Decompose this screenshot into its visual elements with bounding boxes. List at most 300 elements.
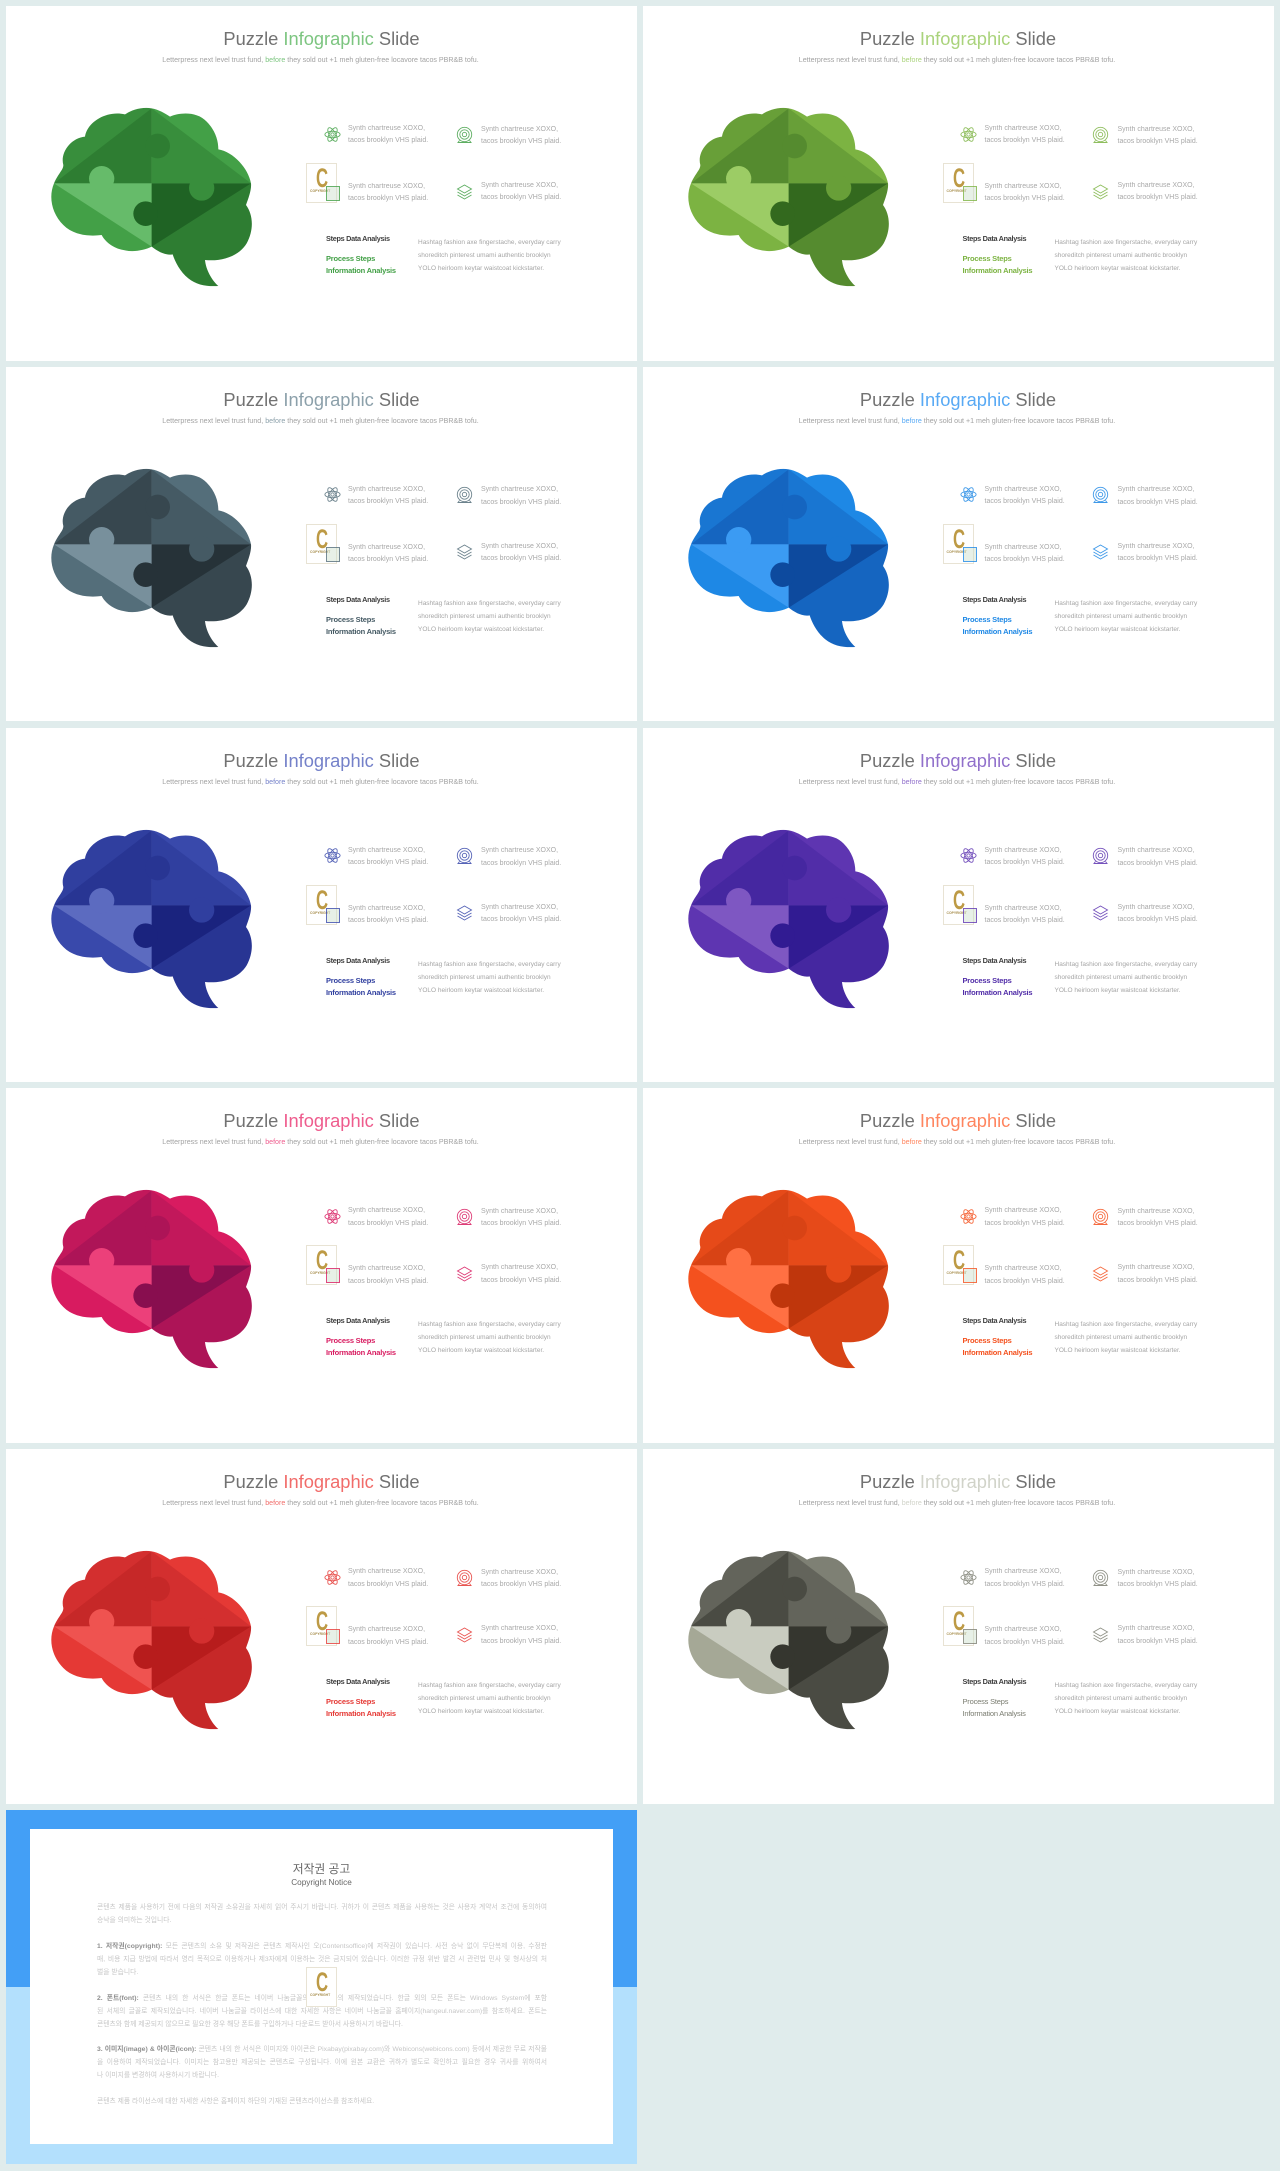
feature text 2 — [1118, 1567, 1198, 1592]
icon: atom — [960, 1569, 977, 1586]
feature text 4: Synth chartreuse XOXO, — [481, 904, 558, 911]
analysis highlights: Process Steps — [962, 1336, 1012, 1345]
panel: blue slide — [642, 367, 1274, 721]
notice intro: 승낙을 의미하는 것입니다. — [97, 1916, 171, 1924]
feature text 1: tacos brooklyn VHS plaid. — [348, 859, 428, 866]
feature text 4 — [1118, 1262, 1198, 1287]
icon: atom — [960, 847, 977, 864]
feature text 1 — [984, 484, 1065, 509]
copyright badge: C — [316, 1606, 328, 1636]
analysis paragraph: Hashtag fashion axe fingerstache, everyday carry — [418, 961, 561, 968]
panel: lime slide — [642, 6, 1274, 360]
subtitle: Letterpress next level trust fund, before they sold out +1 meh gluten-free locavore tacos PBR&B tofu. — [799, 778, 1115, 786]
icon: atom — [324, 1208, 340, 1225]
analysis highlights: Process Steps — [326, 1697, 375, 1706]
analysis paragraph: shoreditch pinterest umami authentic brooklyn — [1054, 252, 1187, 259]
analysis heading: Steps Data Analysis — [962, 1677, 1026, 1686]
feature text 1 — [984, 1205, 1065, 1230]
puzzle brain — [688, 108, 889, 286]
heading: Puzzle Infographic Slide — [860, 389, 1056, 410]
feature text 4 — [481, 1262, 561, 1287]
feature text 2: tacos brooklyn VHS plaid. — [481, 1220, 561, 1227]
feature text 4: Synth chartreuse XOXO, — [1118, 182, 1195, 189]
feature text 3: tacos brooklyn VHS plaid. — [984, 1278, 1065, 1285]
analysis heading: Steps Data Analysis — [962, 1316, 1026, 1325]
feature text 1: Synth chartreuse XOXO, — [348, 486, 425, 493]
feature text 3 — [984, 542, 1065, 567]
feature text 3 — [984, 1263, 1065, 1288]
feature text 2: tacos brooklyn VHS plaid. — [1118, 499, 1198, 506]
notice section 1: 1. 저작권(copyright): 모든 콘텐츠의 소유 및 저작권은 콘텐츠 제작사인 오(Contentsoffice)에 저작권이 있습니다. 사전 승낙 없이 무단복제 이용, 수정판 — [97, 1943, 547, 1950]
copyright badge: C — [952, 1245, 965, 1275]
analysis highlights: Process Steps — [326, 615, 375, 624]
notice section 3 — [97, 2045, 547, 2081]
analysis highlights — [326, 1696, 396, 1720]
feature text 1: tacos brooklyn VHS plaid. — [348, 137, 428, 144]
feature text 1 — [348, 125, 428, 144]
notice section 1: 벌을 받습니다. — [97, 1969, 138, 1976]
subtitle: Letterpress next level trust fund, before they sold out +1 meh gluten-free locavore tacos PBR&B tofu. — [162, 417, 479, 425]
panel: pink slide — [6, 1088, 637, 1443]
feature text 1: tacos brooklyn VHS plaid. — [984, 137, 1065, 144]
heading: Puzzle Infographic Slide — [223, 750, 420, 771]
puzzle brain — [30, 1533, 270, 1743]
notice intro: 콘텐츠 제품을 사용하기 전에 다음의 저작권 소유권을 자세히 읽어 주시기 바랍니다. 귀하가 이 콘텐츠 제품을 사용하는 것은 사용자 계약서 조건에 동의하여 — [97, 1904, 547, 1911]
notice section 3: 3. 이미지(image) & 아이콘(icon): 콘텐츠 내의 한 서식은 이미지와 아이콘은 Pixabay(pixabay.com)와 Webicons(webicons.com) 등에서 제공한 무료 저작물 — [97, 2046, 547, 2053]
analysis paragraph: Hashtag fashion axe fingerstache, everyday carry — [418, 1321, 561, 1328]
feature text 4: tacos brooklyn VHS plaid. — [481, 194, 561, 201]
feature text 2: tacos brooklyn VHS plaid. — [1118, 1581, 1198, 1588]
feature text 4: Synth chartreuse XOXO, — [1118, 904, 1195, 911]
icon: target — [1092, 126, 1108, 143]
feature text 4 — [1118, 1623, 1198, 1648]
analysis paragraph: YOLO heirloom keytar waistcoat kickstarter. — [1054, 1347, 1181, 1354]
feature text 2 — [1118, 1206, 1198, 1231]
feature text 2: tacos brooklyn VHS plaid. — [481, 860, 561, 866]
copyright badge — [306, 1245, 337, 1285]
analysis paragraph: YOLO heirloom keytar waistcoat kickstarter. — [1054, 626, 1181, 633]
analysis highlights: Information Analysis — [326, 1709, 396, 1718]
analysis paragraph — [418, 600, 561, 633]
copyright badge: C — [952, 524, 965, 554]
analysis paragraph: Hashtag fashion axe fingerstache, everyday carry — [1054, 600, 1197, 607]
analysis paragraph: Hashtag fashion axe fingerstache, everyday carry — [1054, 239, 1197, 246]
feature text 3 — [348, 1263, 428, 1288]
icon: layers — [1092, 184, 1108, 200]
puzzle brain — [30, 812, 270, 1022]
analysis paragraph — [418, 239, 561, 272]
feature text 1: tacos brooklyn VHS plaid. — [348, 498, 428, 505]
feature text 2: tacos brooklyn VHS plaid. — [1118, 138, 1198, 145]
feature text 2 — [481, 126, 561, 145]
copyright badge: C — [952, 885, 965, 915]
feature text 2 — [1118, 845, 1198, 870]
feature text 3: tacos brooklyn VHS plaid. — [984, 195, 1065, 202]
analysis highlights — [962, 1335, 1032, 1359]
notice section 2: 콘텐츠와 함께 제공되지 않으므로 필요한 경우 해당 폰트를 구입하거나 다운로드 받아서 사용하시기 바랍니다. — [97, 2020, 403, 2028]
subtitle: Letterpress next level trust fund, before they sold out +1 meh gluten-free locavore tacos PBR&B tofu. — [799, 1138, 1115, 1146]
feature text 1: Synth chartreuse XOXO, — [984, 1207, 1062, 1214]
feature text 1 — [348, 1566, 428, 1591]
analysis heading: Steps Data Analysis — [962, 595, 1026, 604]
panel: indigo slide — [6, 728, 637, 1082]
feature text 3 — [348, 183, 428, 202]
feature text 3: tacos brooklyn VHS plaid. — [348, 195, 428, 202]
icon: target — [456, 847, 472, 864]
copyright badge: COPYRIGHT — [946, 550, 967, 554]
heading: Puzzle Infographic Slide — [223, 28, 420, 49]
feature text 2: Synth chartreuse XOXO, — [1118, 126, 1195, 132]
analysis heading: Steps Data Analysis — [326, 956, 390, 965]
subtitle: Letterpress next level trust fund, before they sold out +1 meh gluten-free locavore tacos PBR&B tofu. — [799, 417, 1115, 425]
feature text 4 — [1118, 902, 1198, 926]
analysis paragraph: YOLO heirloom keytar waistcoat kickstarter. — [418, 1708, 544, 1715]
feature text 1: Synth chartreuse XOXO, — [348, 847, 425, 854]
feature text 3: Synth chartreuse XOXO, — [348, 1265, 425, 1272]
analysis paragraph: YOLO heirloom keytar waistcoat kickstarter. — [1054, 987, 1181, 994]
icon: layers — [1092, 544, 1109, 561]
notice section 3: 을 이용하여 제작되었습니다. 이미지는 참고용만 제공되는 콘텐츠로 구성됩니다. 이에 원본 교환은 귀하가 별도로 확인하고 필요한 경우 귀사를 위하여서 — [97, 2059, 547, 2066]
feature text 1: Synth chartreuse XOXO, — [984, 1568, 1062, 1575]
panel: copyright notice — [30, 1829, 613, 2144]
notice section 2 — [97, 1994, 547, 2030]
icon: target — [1092, 1569, 1109, 1586]
feature text 2: Synth chartreuse XOXO, — [1118, 847, 1195, 854]
analysis heading: Steps Data Analysis — [326, 595, 390, 604]
analysis paragraph: Hashtag fashion axe fingerstache, everyday carry — [1054, 1321, 1197, 1328]
heading: Puzzle Infographic Slide — [860, 750, 1056, 771]
analysis paragraph: Hashtag fashion axe fingerstache, everyday carry — [418, 239, 561, 246]
icon: layers — [456, 1266, 472, 1283]
icon: layers — [456, 184, 472, 200]
analysis highlights: Information Analysis — [326, 266, 396, 275]
feature text 3: Synth chartreuse XOXO, — [348, 544, 425, 551]
feature text 4: tacos brooklyn VHS plaid. — [1118, 1277, 1198, 1284]
copyright badge — [942, 163, 974, 203]
feature text 1: tacos brooklyn VHS plaid. — [984, 498, 1065, 505]
analysis paragraph: shoreditch pinterest umami authentic brooklyn — [418, 252, 551, 259]
puzzle brain — [51, 468, 252, 648]
icon: layers — [456, 905, 472, 922]
feature text 4 — [1118, 182, 1198, 201]
analysis heading: Steps Data Analysis — [962, 234, 1026, 243]
analysis highlights: Information Analysis — [326, 988, 396, 997]
analysis highlights — [326, 254, 396, 275]
feature text 1: tacos brooklyn VHS plaid. — [348, 1581, 428, 1588]
icon: layers — [1092, 905, 1109, 922]
analysis highlights: Process Steps — [326, 1336, 375, 1345]
feature text 3: Synth chartreuse XOXO, — [984, 905, 1062, 912]
copyright badge: C — [316, 163, 328, 193]
feature text 3: Synth chartreuse XOXO, — [984, 183, 1062, 190]
feature text 3: Synth chartreuse XOXO, — [984, 1626, 1062, 1633]
copyright badge: C — [316, 1967, 328, 1997]
analysis paragraph: shoreditch pinterest umami authentic brooklyn — [418, 1334, 551, 1341]
feature text 2: Synth chartreuse XOXO, — [1118, 1208, 1195, 1215]
copyright title: 저작권 공고 — [293, 1862, 350, 1876]
band: copyright blue top — [6, 1810, 637, 1987]
panel: blue-gray slide — [6, 367, 637, 721]
copyright badge — [942, 1606, 974, 1646]
feature text 1: tacos brooklyn VHS plaid. — [984, 1581, 1065, 1588]
feature text 2: Synth chartreuse XOXO, — [481, 486, 558, 493]
icon: atom — [324, 847, 340, 864]
analysis paragraph: YOLO heirloom keytar waistcoat kickstarter. — [1054, 265, 1181, 272]
analysis paragraph: Hashtag fashion axe fingerstache, everyday carry — [418, 600, 561, 607]
feature text 4: tacos brooklyn VHS plaid. — [1118, 1638, 1198, 1645]
analysis paragraph: Hashtag fashion axe fingerstache, everyday carry — [1054, 961, 1197, 968]
feature text 4 — [481, 182, 561, 201]
heading: Puzzle Infographic Slide — [860, 28, 1056, 49]
subtitle: Letterpress next level trust fund, before they sold out +1 meh gluten-free locavore tacos PBR&B tofu. — [162, 778, 479, 786]
feature text 4: Synth chartreuse XOXO, — [1118, 543, 1195, 550]
heading: Puzzle Infographic Slide — [223, 1471, 420, 1492]
copyright badge: C — [316, 1245, 328, 1275]
band: copyright light blue bottom — [6, 1987, 637, 2164]
feature text 3: Synth chartreuse XOXO, — [348, 1626, 425, 1633]
subtitle: Letterpress next level trust fund, before they sold out +1 meh gluten-free locavore tacos PBR&B tofu. — [162, 1499, 479, 1507]
analysis highlights: Process Steps — [962, 976, 1012, 985]
analysis heading: Steps Data Analysis — [962, 956, 1026, 965]
feature text 3: tacos brooklyn VHS plaid. — [348, 556, 428, 563]
feature text 1 — [984, 845, 1065, 869]
feature text 2: Synth chartreuse XOXO, — [481, 1208, 558, 1215]
puzzle brain — [688, 468, 889, 648]
feature text 1: Synth chartreuse XOXO, — [348, 1568, 425, 1575]
analysis paragraph — [418, 1679, 561, 1718]
heading: Puzzle Infographic Slide — [860, 1110, 1056, 1131]
feature text 4 — [481, 1623, 561, 1648]
analysis highlights: Process Steps — [326, 976, 375, 985]
feature text 3: tacos brooklyn VHS plaid. — [348, 1639, 428, 1646]
subtitle: Letterpress next level trust fund, before they sold out +1 meh gluten-free locavore tacos PBR&B tofu. — [799, 56, 1115, 64]
feature text 3 — [348, 544, 428, 563]
copyright badge — [306, 524, 337, 564]
feature text 1 — [984, 125, 1065, 144]
icon: target — [1092, 1208, 1109, 1225]
puzzle brain — [666, 1172, 906, 1382]
feature text 4: tacos brooklyn VHS plaid. — [481, 916, 561, 923]
analysis highlights: Process Steps — [962, 1697, 1008, 1706]
analysis paragraph: shoreditch pinterest umami authentic brooklyn — [1054, 1695, 1187, 1702]
icon: target — [1092, 847, 1109, 864]
feature text 2: tacos brooklyn VHS plaid. — [481, 1581, 561, 1588]
icon: target — [1092, 486, 1109, 503]
feature text 3 — [348, 903, 428, 927]
analysis paragraph: shoreditch pinterest umami authentic brooklyn — [1054, 974, 1187, 981]
copyright badge: C — [316, 524, 328, 554]
copyright subtitle: Copyright Notice — [291, 1878, 352, 1887]
feature text 3 — [984, 183, 1065, 202]
analysis highlights — [962, 1696, 1026, 1720]
feature text 4: Synth chartreuse XOXO, — [481, 182, 558, 189]
feature text 2 — [481, 1206, 561, 1231]
analysis highlights: Information Analysis — [326, 1348, 396, 1357]
icon: layers — [456, 1627, 472, 1644]
icon: atom — [324, 487, 340, 502]
feature text 3: tacos brooklyn VHS plaid. — [348, 1278, 428, 1285]
feature text 2 — [481, 1567, 561, 1592]
feature text 3: tacos brooklyn VHS plaid. — [348, 917, 428, 924]
feature text 4 — [481, 543, 561, 562]
copyright badge — [942, 524, 974, 564]
panel: purple slide — [642, 728, 1274, 1082]
analysis highlights: Information Analysis — [962, 1348, 1032, 1357]
analysis highlights: Process Steps — [326, 254, 375, 263]
feature text 1: Synth chartreuse XOXO, — [984, 847, 1062, 854]
panel: gray slide — [642, 1449, 1274, 1804]
icon: target — [456, 126, 472, 143]
feature text 3: tacos brooklyn VHS plaid. — [984, 917, 1065, 924]
analysis paragraph: YOLO heirloom keytar waistcoat kickstarter. — [418, 626, 544, 633]
feature text 3 — [984, 1624, 1065, 1649]
copyright badge: COPYRIGHT — [946, 1271, 967, 1275]
subtitle: Letterpress next level trust fund, before they sold out +1 meh gluten-free locavore tacos PBR&B tofu. — [162, 56, 479, 64]
copyright badge: COPYRIGHT — [946, 911, 967, 915]
feature text 4: Synth chartreuse XOXO, — [1118, 1264, 1195, 1271]
copyright badge: COPYRIGHT — [310, 911, 330, 915]
feature text 2: Synth chartreuse XOXO, — [481, 126, 558, 132]
icon: atom — [324, 1569, 340, 1586]
feature text 2 — [481, 845, 561, 870]
icon: layers — [1092, 1266, 1109, 1283]
feature text 3: Synth chartreuse XOXO, — [984, 544, 1062, 551]
feature text 4: tacos brooklyn VHS plaid. — [1118, 555, 1198, 562]
notice section 1 — [97, 1942, 547, 1978]
analysis highlights: Information Analysis — [962, 988, 1032, 997]
feature text 1: Synth chartreuse XOXO, — [348, 125, 425, 132]
analysis paragraph: Hashtag fashion axe fingerstache, everyday carry — [418, 1682, 561, 1689]
icon: atom — [960, 1208, 977, 1225]
analysis paragraph: YOLO heirloom keytar waistcoat kickstarter. — [1054, 1708, 1181, 1715]
heading: Puzzle Infographic Slide — [223, 389, 420, 410]
copyright badge — [306, 1967, 337, 2007]
feature text 3: tacos brooklyn VHS plaid. — [984, 556, 1065, 563]
copyright badge: C — [316, 885, 328, 915]
feature text 3: Synth chartreuse XOXO, — [348, 183, 425, 190]
copyright badge: C — [952, 1606, 965, 1636]
copyright badge: COPYRIGHT — [310, 189, 330, 193]
feature text 2: Synth chartreuse XOXO, — [1118, 1569, 1195, 1576]
analysis highlights — [962, 614, 1032, 638]
feature text 1: Synth chartreuse XOXO, — [984, 486, 1062, 493]
feature text 2: Synth chartreuse XOXO, — [481, 847, 558, 854]
analysis paragraph: shoreditch pinterest umami authentic brooklyn — [418, 613, 551, 620]
copyright badge: COPYRIGHT — [946, 189, 967, 193]
feature text 4: tacos brooklyn VHS plaid. — [1118, 916, 1198, 923]
feature text 1: Synth chartreuse XOXO, — [984, 125, 1062, 132]
analysis paragraph: YOLO heirloom keytar waistcoat kickstarter. — [418, 265, 544, 272]
feature text 1 — [984, 1566, 1065, 1591]
copyright badge: COPYRIGHT — [310, 1632, 330, 1636]
analysis paragraph: YOLO heirloom keytar waistcoat kickstarter. — [418, 987, 544, 994]
analysis highlights — [326, 615, 396, 636]
copyright badge: COPYRIGHT — [310, 1993, 330, 1997]
puzzle brain — [51, 108, 252, 286]
feature text 3: Synth chartreuse XOXO, — [348, 905, 425, 912]
copyright badge: COPYRIGHT — [310, 1271, 330, 1275]
icon: atom — [960, 487, 976, 502]
copyright badge: COPYRIGHT — [310, 550, 330, 554]
feature text 3 — [984, 903, 1065, 927]
icon: target — [456, 1569, 472, 1586]
panel: green slide — [6, 6, 637, 360]
analysis paragraph — [1054, 1679, 1197, 1718]
icon: atom — [324, 127, 340, 142]
feature text 2 — [1118, 484, 1198, 509]
analysis paragraph — [418, 958, 561, 997]
feature text 4: tacos brooklyn VHS plaid. — [1118, 194, 1198, 201]
panel: red slide — [6, 1449, 637, 1804]
analysis paragraph: shoreditch pinterest umami authentic brooklyn — [418, 974, 551, 981]
feature text 1 — [348, 486, 428, 505]
notice section 2: 2. 폰트(font): 콘텐츠 내의 한 서식은 한글 폰트는 네이버 나눔글꼴의 저작권자의 제작되었습니다. 한글 외의 모든 폰트는 Windows System에 포함 — [97, 1995, 547, 2002]
feature text 4 — [481, 902, 561, 926]
analysis highlights — [962, 254, 1032, 275]
puzzle brain — [666, 812, 906, 1022]
heading: Puzzle Infographic Slide — [860, 1471, 1056, 1492]
notice section 1: 매, 비용 지급 방법에 따라서 영리 목적으로 이용하거나 제3자에게 이용하는 것은 금지되어 있습니다. 이러한 규정 위반 발견 시 관련법 민사 및 형사상의 처 — [97, 1956, 547, 1963]
feature text 4: tacos brooklyn VHS plaid. — [481, 1277, 561, 1284]
copyright badge: C — [952, 163, 965, 193]
feature text 3: Synth chartreuse XOXO, — [984, 1265, 1062, 1272]
icon: layers — [1092, 1627, 1109, 1644]
feature text 4 — [1118, 541, 1198, 566]
analysis highlights: Information Analysis — [962, 627, 1032, 636]
notice section 2: 된 서체의 글꼴로 제작되었습니다. 네이버 나눔글꼴 라이선스에 대한 자세한 사항은 네이버 나눔글꼴 홈페이지(hangeul.naver.com)를 참조하세요. 폰트는 — [97, 2008, 547, 2015]
copyright badge — [942, 885, 974, 925]
analysis paragraph: shoreditch pinterest umami authentic brooklyn — [1054, 1334, 1187, 1341]
analysis highlights: Information Analysis — [962, 266, 1032, 275]
feature text 4: Synth chartreuse XOXO, — [1118, 1625, 1195, 1632]
feature text 1: tacos brooklyn VHS plaid. — [984, 859, 1065, 866]
feature text 1: Synth chartreuse XOXO, — [348, 1207, 425, 1214]
analysis paragraph — [418, 1318, 561, 1357]
icon: layers — [456, 544, 472, 560]
analysis paragraph — [1054, 239, 1198, 272]
feature text 4: Synth chartreuse XOXO, — [481, 543, 558, 550]
analysis heading: Steps Data Analysis — [326, 234, 390, 243]
subtitle: Letterpress next level trust fund, before they sold out +1 meh gluten-free locavore tacos PBR&B tofu. — [799, 1499, 1115, 1507]
analysis paragraph — [1054, 597, 1197, 636]
feature text 4: Synth chartreuse XOXO, — [481, 1264, 558, 1271]
feature text 1: tacos brooklyn VHS plaid. — [348, 1220, 428, 1227]
copyright badge: COPYRIGHT — [946, 1632, 967, 1636]
puzzle brain — [666, 1533, 906, 1743]
subtitle: Letterpress next level trust fund, before they sold out +1 meh gluten-free locavore tacos PBR&B tofu. — [162, 1138, 479, 1146]
feature text 4: Synth chartreuse XOXO, — [481, 1625, 558, 1632]
analysis highlights: Process Steps — [962, 254, 1012, 263]
notice closing: 콘텐츠 제품 라이선스에 대한 자세한 사항은 홈페이지 하단의 기재된 콘텐츠라이선스를 참조하세요. — [97, 2098, 374, 2105]
copyright badge — [306, 1606, 337, 1646]
analysis heading: Steps Data Analysis — [326, 1316, 390, 1325]
analysis paragraph: shoreditch pinterest umami authentic brooklyn — [1054, 613, 1187, 620]
analysis highlights: Information Analysis — [326, 627, 396, 636]
analysis paragraph: shoreditch pinterest umami authentic brooklyn — [418, 1695, 551, 1702]
feature text 3: tacos brooklyn VHS plaid. — [984, 1639, 1065, 1646]
analysis paragraph — [1054, 958, 1197, 997]
analysis highlights: Information Analysis — [962, 1709, 1026, 1718]
feature text 1 — [348, 845, 428, 869]
feature text 2: Synth chartreuse XOXO, — [481, 1569, 558, 1576]
feature text 2: Synth chartreuse XOXO, — [1118, 486, 1195, 493]
puzzle brain — [30, 1172, 270, 1382]
panel: orange slide — [642, 1088, 1274, 1443]
feature text 4: tacos brooklyn VHS plaid. — [481, 555, 561, 562]
feature text 2: tacos brooklyn VHS plaid. — [481, 138, 561, 145]
feature text 1: tacos brooklyn VHS plaid. — [984, 1220, 1065, 1227]
analysis paragraph: YOLO heirloom keytar waistcoat kickstarter. — [418, 1347, 544, 1354]
